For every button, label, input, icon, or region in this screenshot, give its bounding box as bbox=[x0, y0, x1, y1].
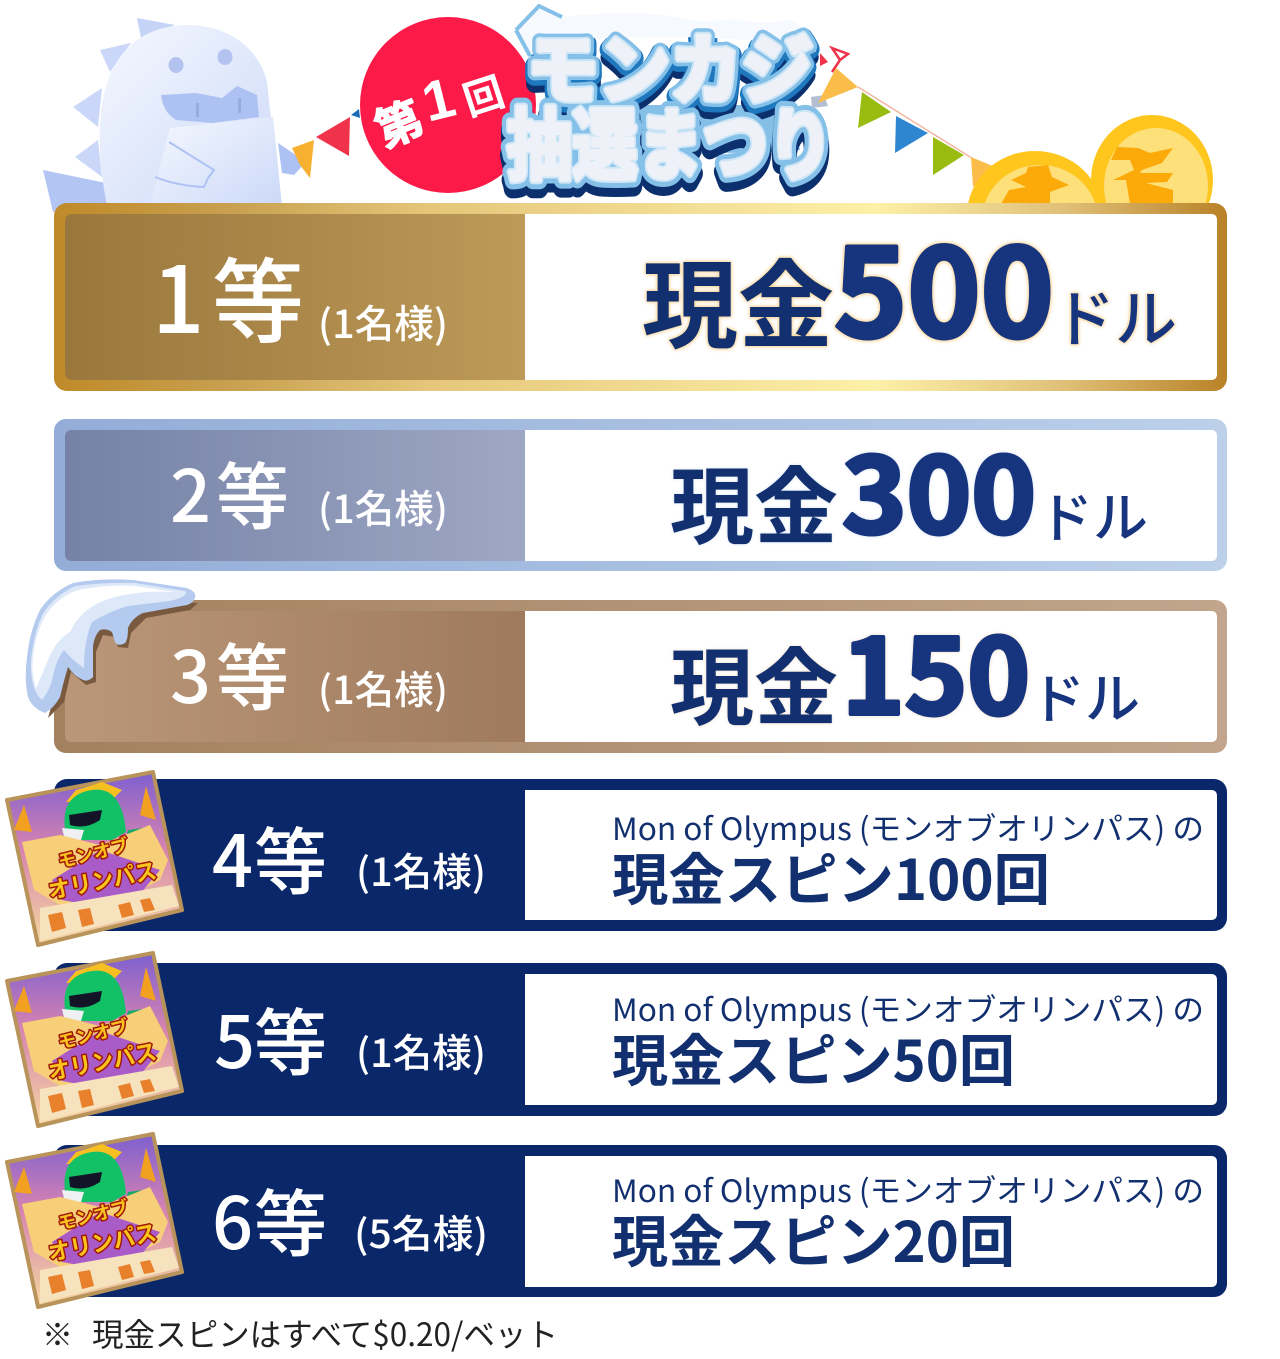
coins bbox=[967, 115, 1213, 279]
panel: 3rd prize: 等 bbox=[216, 620, 289, 726]
rank label: 4等: 4 bbox=[212, 803, 253, 908]
icon: game tile 4th bbox=[7, 772, 182, 945]
panel: 2nd prize bbox=[54, 412, 1227, 571]
bunting: right flags bbox=[811, 48, 995, 187]
icon: game tile 5th: オリンパス bbox=[45, 1033, 159, 1087]
rank label: 6等: 6 bbox=[212, 1165, 253, 1270]
footnote: 現金スピンはすべて$0.20/ベット bbox=[92, 1310, 558, 1356]
prize description: Mon of Olympus (モンオブオリンパス) の bbox=[612, 1166, 1204, 1211]
bunting: left flags bbox=[292, 109, 360, 178]
winners: 5名様: (5名様) bbox=[354, 1204, 488, 1260]
logo: モンカジ抽選まつり: モンカジ bbox=[527, 12, 813, 122]
panel: 2nd prize: ドル bbox=[1038, 474, 1148, 553]
icon: game tile 4th: モンオブ bbox=[55, 831, 131, 874]
prize: 現金スピン50回: 現金スピン50回 bbox=[612, 1017, 1015, 1098]
panel: 2nd prize: 等 bbox=[216, 439, 289, 545]
panel: 3rd prize: 150 bbox=[842, 593, 1030, 744]
panel: 6th prize bbox=[54, 1145, 1227, 1297]
rank label: 1等: 1 bbox=[152, 227, 204, 360]
icon: game tile 4th: オリンパス bbox=[45, 852, 159, 906]
panel: 1st prize: 500 bbox=[834, 196, 1054, 373]
winners: 1名様: (1名様) bbox=[318, 294, 448, 350]
rank label: 3等: 3 bbox=[170, 619, 211, 724]
logo: モンカジ抽選まつり: 抽選まつり bbox=[507, 92, 833, 204]
logo: モンカジ抽選まつり: 抽選まつり bbox=[507, 84, 833, 196]
prize description: Mon of Olympus (モンオブオリンパス) の bbox=[612, 804, 1204, 849]
panel: 1st prize: ドル bbox=[1053, 269, 1177, 359]
logo: モンカジ抽選まつり: モンカジ bbox=[527, 20, 813, 130]
icon: game tile 5th bbox=[7, 953, 182, 1126]
prize: 現金500ドル: 現金 bbox=[642, 229, 834, 368]
badge: 第1回: 第 bbox=[365, 83, 432, 161]
icon: game tile 6th: モンオブ bbox=[55, 1193, 131, 1236]
logo: モンカジ抽選まつり: 抽選まつり bbox=[507, 84, 833, 196]
footnote: ※ bbox=[42, 1310, 73, 1355]
winners: 1名様: (1名様) bbox=[318, 660, 448, 716]
winners: 1名様: (1名様) bbox=[318, 479, 448, 535]
logo: モンカジ抽選まつり bbox=[507, 6, 833, 204]
panel: 5th prize: 等 bbox=[254, 985, 327, 1091]
logo: モンカジ抽選まつり: モンカジ bbox=[527, 9, 813, 119]
icon: game tile 6th bbox=[7, 1134, 182, 1307]
prize description: Mon of Olympus (モンオブオリンパス) の bbox=[612, 985, 1204, 1030]
panel: 4th prize: 等 bbox=[254, 804, 327, 910]
prize: 現金150ドル: 現金 bbox=[670, 622, 838, 743]
badge: 第1回 bbox=[360, 17, 536, 193]
winners: 1名様: (1名様) bbox=[356, 1023, 486, 1079]
mascot: pale dinosaur bbox=[43, 18, 306, 212]
badge: 第1回: 回 bbox=[455, 60, 511, 127]
panel: 3rd prize: ドル bbox=[1030, 655, 1140, 734]
panel: 5th prize bbox=[54, 963, 1227, 1116]
prize: 現金スピン100回: 現金スピン100回 bbox=[612, 836, 1050, 917]
panel: 6th prize: 等 bbox=[254, 1166, 327, 1272]
logo: モンカジ抽選まつり: 抽選まつり bbox=[507, 84, 833, 196]
badge: 第1回: 1 bbox=[416, 65, 461, 134]
panel: 1st prize bbox=[54, 196, 1227, 391]
panel: 2nd prize: 300 bbox=[842, 412, 1036, 563]
panel: 4th prize bbox=[54, 779, 1227, 931]
prize: 現金スピン20回: 現金スピン20回 bbox=[612, 1198, 1015, 1279]
panel: 3rd prize bbox=[54, 593, 1227, 753]
icon: game tile 6th: オリンパス bbox=[45, 1214, 159, 1268]
rank label: 2等: 2 bbox=[170, 438, 211, 543]
icon: game tile 5th: モンオブ bbox=[55, 1012, 131, 1055]
logo: モンカジ抽選まつり: モンカジ bbox=[527, 9, 813, 119]
rank label: 5等: 5 bbox=[214, 984, 255, 1089]
panel: 1st prize: 等 bbox=[212, 229, 304, 362]
prize: 現金300ドル: 現金 bbox=[670, 441, 838, 562]
logo: モンカジ抽選まつり: モンカジ bbox=[527, 9, 813, 119]
decoration: snow cap bbox=[26, 579, 198, 718]
winners: 1名様: (1名様) bbox=[356, 842, 486, 898]
